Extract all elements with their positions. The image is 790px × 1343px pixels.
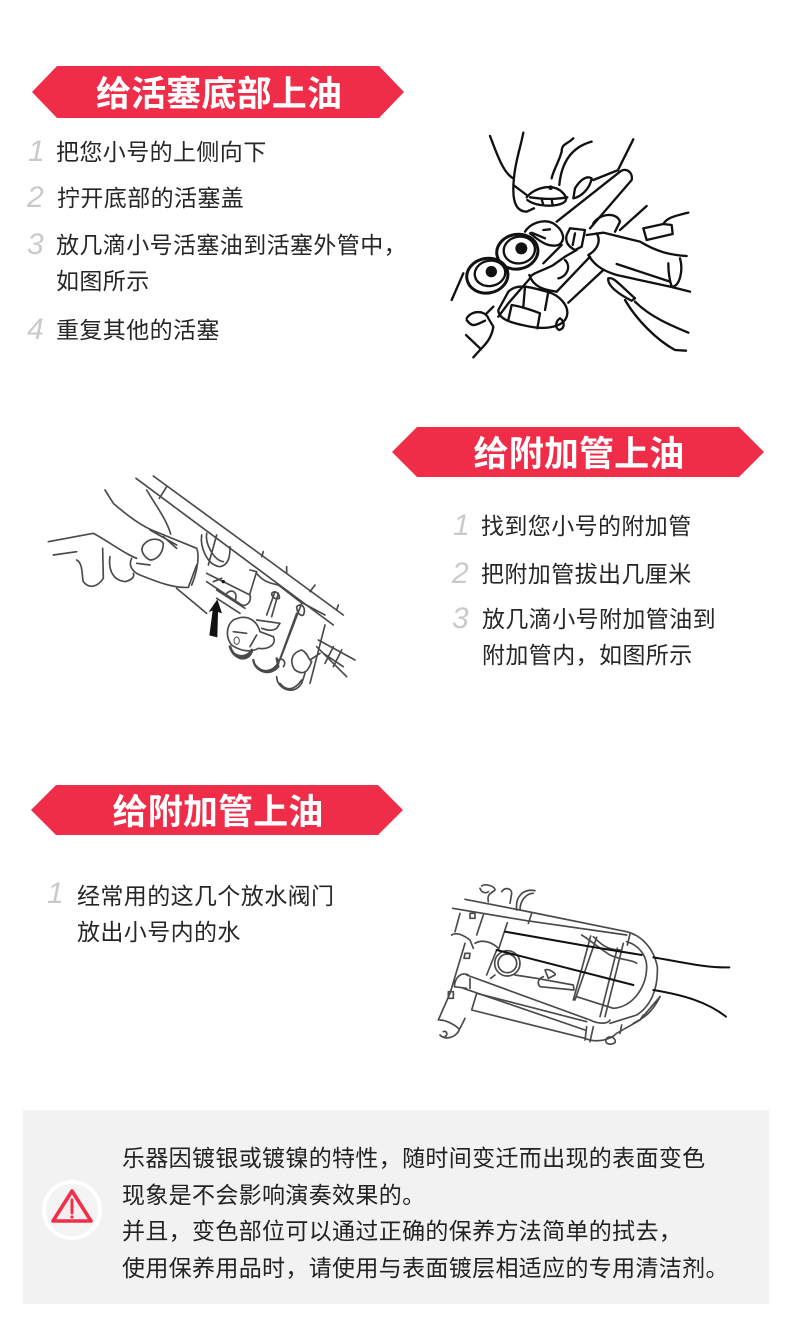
- notice text: 使用保养用品时，请使用与表面镀层相适应的专用清洁剂。: [122, 1255, 729, 1281]
- illustration: trumpet water valves: [438, 884, 730, 1046]
- illustration: hands oiling piston bottom: [450, 132, 692, 359]
- step 3 text: 放几滴小号附加管油到: [482, 606, 716, 632]
- step 2 number: 2: [452, 557, 469, 590]
- step 3 text: [482, 606, 716, 668]
- step 2 text: 拧开底部的活塞盖: [57, 185, 244, 211]
- step 1 number: 1: [47, 877, 64, 910]
- step 3 text: 如图所示: [56, 268, 150, 294]
- step 3 text: 附加管内，如图所示: [482, 642, 693, 668]
- step 3 number: 3: [452, 602, 469, 635]
- step 1 text: 把您小号的上侧向下: [56, 139, 267, 165]
- step 4 number: 4: [27, 313, 44, 346]
- notice panel: [23, 1110, 769, 1304]
- banner: tuning slide oiling heading: [392, 427, 764, 477]
- step 1 number: 1: [453, 509, 470, 542]
- step 1 text: [77, 883, 334, 945]
- banner: water valve heading: [31, 785, 403, 835]
- step 1 text: 放出小号内的水: [77, 919, 241, 945]
- banner: water valve heading: 给附加管上油: [113, 793, 323, 832]
- banner: piston oiling heading: [32, 66, 404, 118]
- icon: warning triangle: [42, 1180, 102, 1240]
- step 4 text: 重复其他的活塞: [56, 317, 220, 343]
- notice text: 并且，变色部位可以通过正确的保养方法简单的拭去，: [122, 1218, 682, 1244]
- step 2 number: 2: [27, 181, 44, 214]
- banner: piston oiling heading: 给活塞底部上油: [96, 75, 342, 114]
- step 3 text: 放几滴小号活塞油到活塞外管中，: [56, 232, 407, 258]
- step 3 number: 3: [27, 228, 44, 261]
- step 2 text: 把附加管拔出几厘米: [481, 561, 692, 587]
- step 3 text: [56, 232, 407, 294]
- notice text: [122, 1145, 729, 1281]
- illustration: finger pulling slide with arrow: [48, 475, 356, 691]
- notice text: 现象是不会影响演奏效果的。: [122, 1182, 425, 1208]
- step 1 text: 找到您小号的附加管: [481, 513, 692, 539]
- banner: tuning slide oiling heading: 给附加管上油: [474, 435, 684, 474]
- notice text: 乐器因镀银或镀镍的特性，随时间变迁而出现的表面变色: [122, 1145, 706, 1171]
- step 1 number: 1: [28, 135, 45, 168]
- step 1 text: 经常用的这几个放水阀门: [77, 883, 334, 909]
